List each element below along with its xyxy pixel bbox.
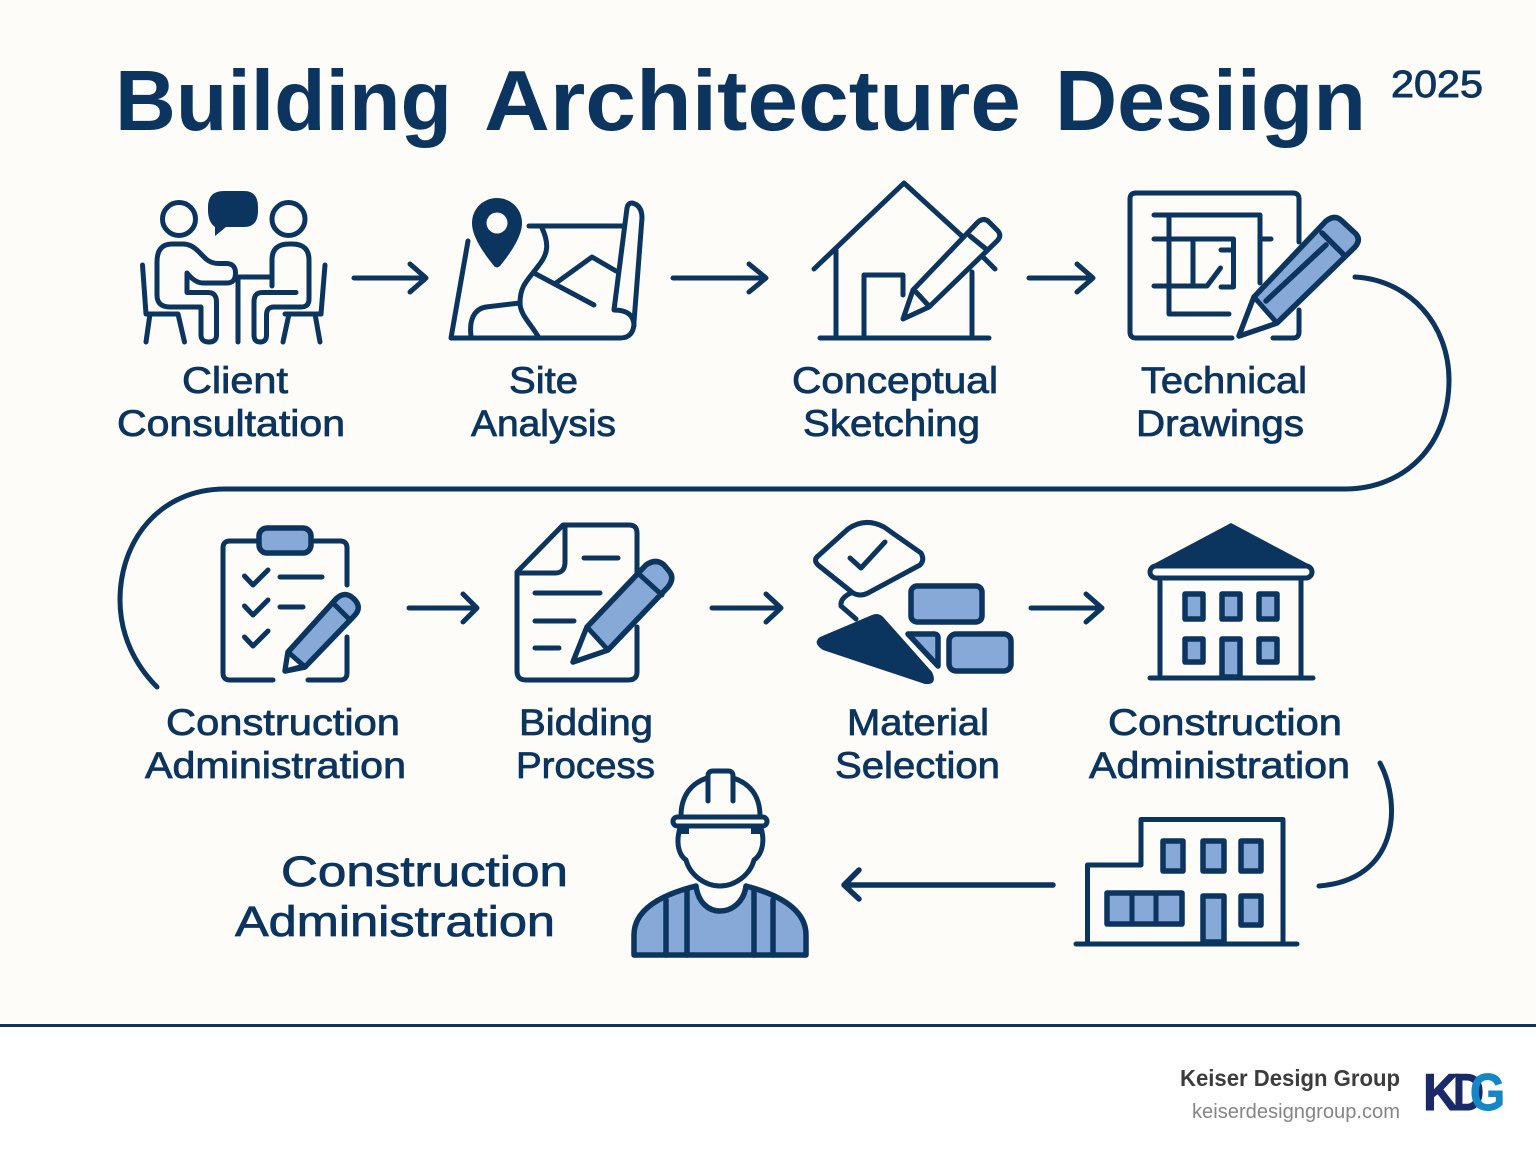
label: bidding process <box>516 702 655 786</box>
label: client consultation: Client <box>182 360 289 401</box>
label: site analysis <box>471 360 616 444</box>
label: material selection: Selection <box>835 745 1000 786</box>
label: technical drawings: Technical <box>1141 360 1307 401</box>
arrow: office to worker <box>844 870 1053 899</box>
logo: KDG <box>1423 1064 1505 1122</box>
icon: material selection <box>816 522 1011 684</box>
label: construction administration (first): Administration <box>145 745 406 786</box>
title: Desiign <box>1055 54 1366 149</box>
label: site analysis: Analysis <box>471 403 616 444</box>
label: material selection: Material <box>847 702 989 743</box>
icon: site analysis <box>451 198 642 338</box>
arrow: bidding to materials <box>712 594 781 622</box>
logo: KDG: K <box>1423 1064 1459 1122</box>
title: Building <box>115 54 452 149</box>
arrow: clipboard to bidding <box>409 594 477 622</box>
arrow: materials to building <box>1031 594 1102 622</box>
label: bidding process: Process <box>516 745 655 786</box>
icon: conceptual sketching <box>814 183 1000 338</box>
label: conceptual sketching <box>792 360 998 444</box>
label: bidding process: Bidding <box>519 702 653 743</box>
label: construction administration (third): Construction <box>281 848 568 896</box>
title <box>115 54 1366 149</box>
label: material selection <box>835 702 1000 786</box>
footer website: keiserdesigngroup.com <box>1192 1101 1400 1123</box>
connector: row 1 to row 2 <box>120 277 1449 687</box>
label: client consultation <box>117 360 345 444</box>
label: construction administration (third): Administration <box>235 898 555 946</box>
footer company name: Keiser Design Group <box>1180 1065 1400 1091</box>
arrow: sketching to drawings <box>1029 264 1093 292</box>
icon: clipboard checklist <box>223 528 358 680</box>
label: construction administration (second): Construction <box>1108 702 1342 743</box>
label: construction administration (third) <box>235 848 568 946</box>
logo: KDG: G <box>1470 1064 1505 1122</box>
icon: building with pitched roof <box>1150 523 1313 678</box>
logo: KDG: D <box>1453 1064 1484 1122</box>
connector: row 2 to row 3 <box>1319 763 1392 886</box>
arrow: client to site <box>354 264 426 292</box>
year label: 2025 <box>1391 64 1483 106</box>
icon: technical drawings <box>1130 193 1358 338</box>
icon: construction worker <box>634 771 806 955</box>
label: technical drawings <box>1136 360 1307 444</box>
arrow: site to sketching <box>673 264 766 292</box>
label: construction administration (first): Construction <box>166 702 400 743</box>
label: conceptual sketching: Conceptual <box>792 360 998 401</box>
title: Architecture <box>484 54 1021 149</box>
label: conceptual sketching: Sketching <box>803 403 980 444</box>
label: site analysis: Site <box>509 360 578 401</box>
icon: client consultation <box>142 191 325 342</box>
label: technical drawings: Drawings <box>1136 403 1304 444</box>
label: construction administration (second): Administration <box>1089 745 1350 786</box>
label: client consultation: Consultation <box>117 403 345 444</box>
label: construction administration (second) <box>1089 702 1350 786</box>
icon: office building <box>1076 820 1297 944</box>
icon: bidding document <box>517 525 672 680</box>
label: construction administration (first) <box>145 702 406 786</box>
